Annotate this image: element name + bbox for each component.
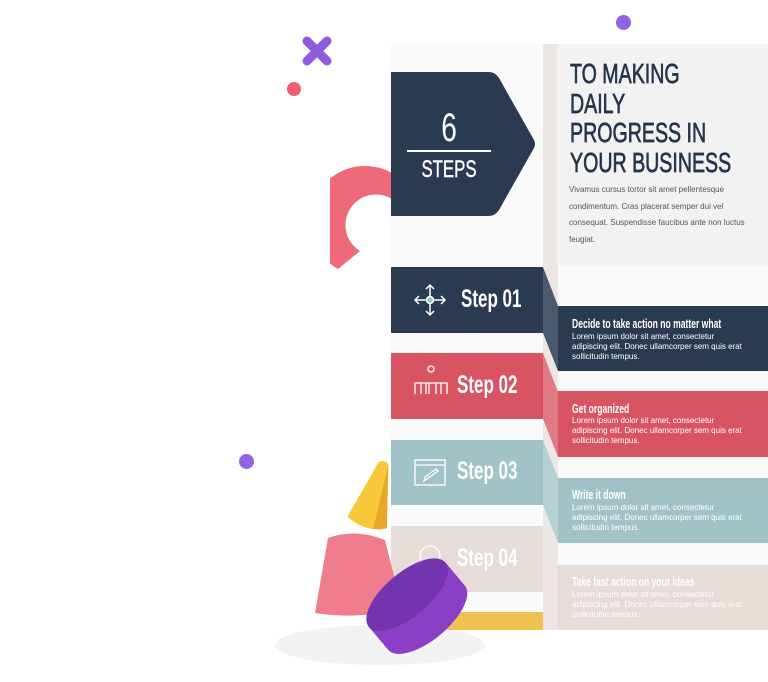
step 04: Take fast action on your ideas (572, 574, 694, 589)
3D shapes (275, 461, 485, 665)
step 01: Lorem ipsum dolor sit amet, consectetur adipiscing elit. Donec ullamcorper sem quis erat sollicitudin tempus. (572, 332, 742, 361)
title: DAILY (570, 88, 625, 118)
decoration: red dot (287, 82, 301, 96)
step 01: Step 01 (461, 285, 521, 313)
step 01: Decide to take action no matter what (572, 316, 721, 331)
decoration: purple dot top (616, 15, 631, 30)
decoration: purple dot left (239, 454, 254, 469)
icon: arrows (415, 285, 445, 315)
step 01 (391, 267, 768, 371)
pink cone (315, 533, 402, 616)
icon: people (415, 366, 447, 394)
hexagon badge: 6 steps (391, 72, 535, 216)
step 02: Get organized (572, 401, 629, 416)
step 03: Write it down (572, 487, 626, 502)
header panel (543, 44, 768, 266)
title: TO MAKING (570, 58, 680, 89)
title (570, 58, 731, 178)
yellow cone (346, 456, 403, 533)
step 04: Lorem ipsum dolor sit amet, consectetur adipiscing elit. Donec ullamcorper sem quis erat sollicitudin tempus. (572, 590, 742, 619)
icon: pencil window (415, 460, 445, 485)
step 02 (391, 353, 768, 457)
hexagon badge: 6 steps: STEPS (421, 156, 477, 183)
decoration: red arc (330, 166, 391, 269)
title: PROGRESS IN (570, 117, 706, 148)
title: YOUR BUSINESS (570, 146, 731, 178)
step 02: Lorem ipsum dolor sit amet, consectetur adipiscing elit. Donec ullamcorper sem quis erat sollicitudin tempus. (572, 416, 742, 445)
purple disc (355, 546, 479, 667)
decoration: purple cross (302, 36, 332, 66)
step 03 (391, 440, 768, 543)
document background (391, 44, 768, 630)
intro text: Vivamus cursus tortor sit amet pellentesque condimentum. Cras placerat semper dui vel consequat. Suspendisse faucibus ante non luctus feugiat. (569, 185, 745, 244)
step 03: Lorem ipsum dolor sit amet, consectetur adipiscing elit. Donec ullamcorper sem quis erat sollicitudin tempus. (572, 503, 742, 532)
step 04 (391, 526, 768, 630)
fold strip (543, 266, 558, 630)
step 03: Step 03 (457, 457, 517, 485)
step 05 partial bar (391, 612, 543, 630)
step 02: Step 02 (457, 371, 517, 399)
step 04: Step 04 (457, 544, 517, 572)
hexagon badge: 6 steps: 6 (441, 106, 457, 150)
